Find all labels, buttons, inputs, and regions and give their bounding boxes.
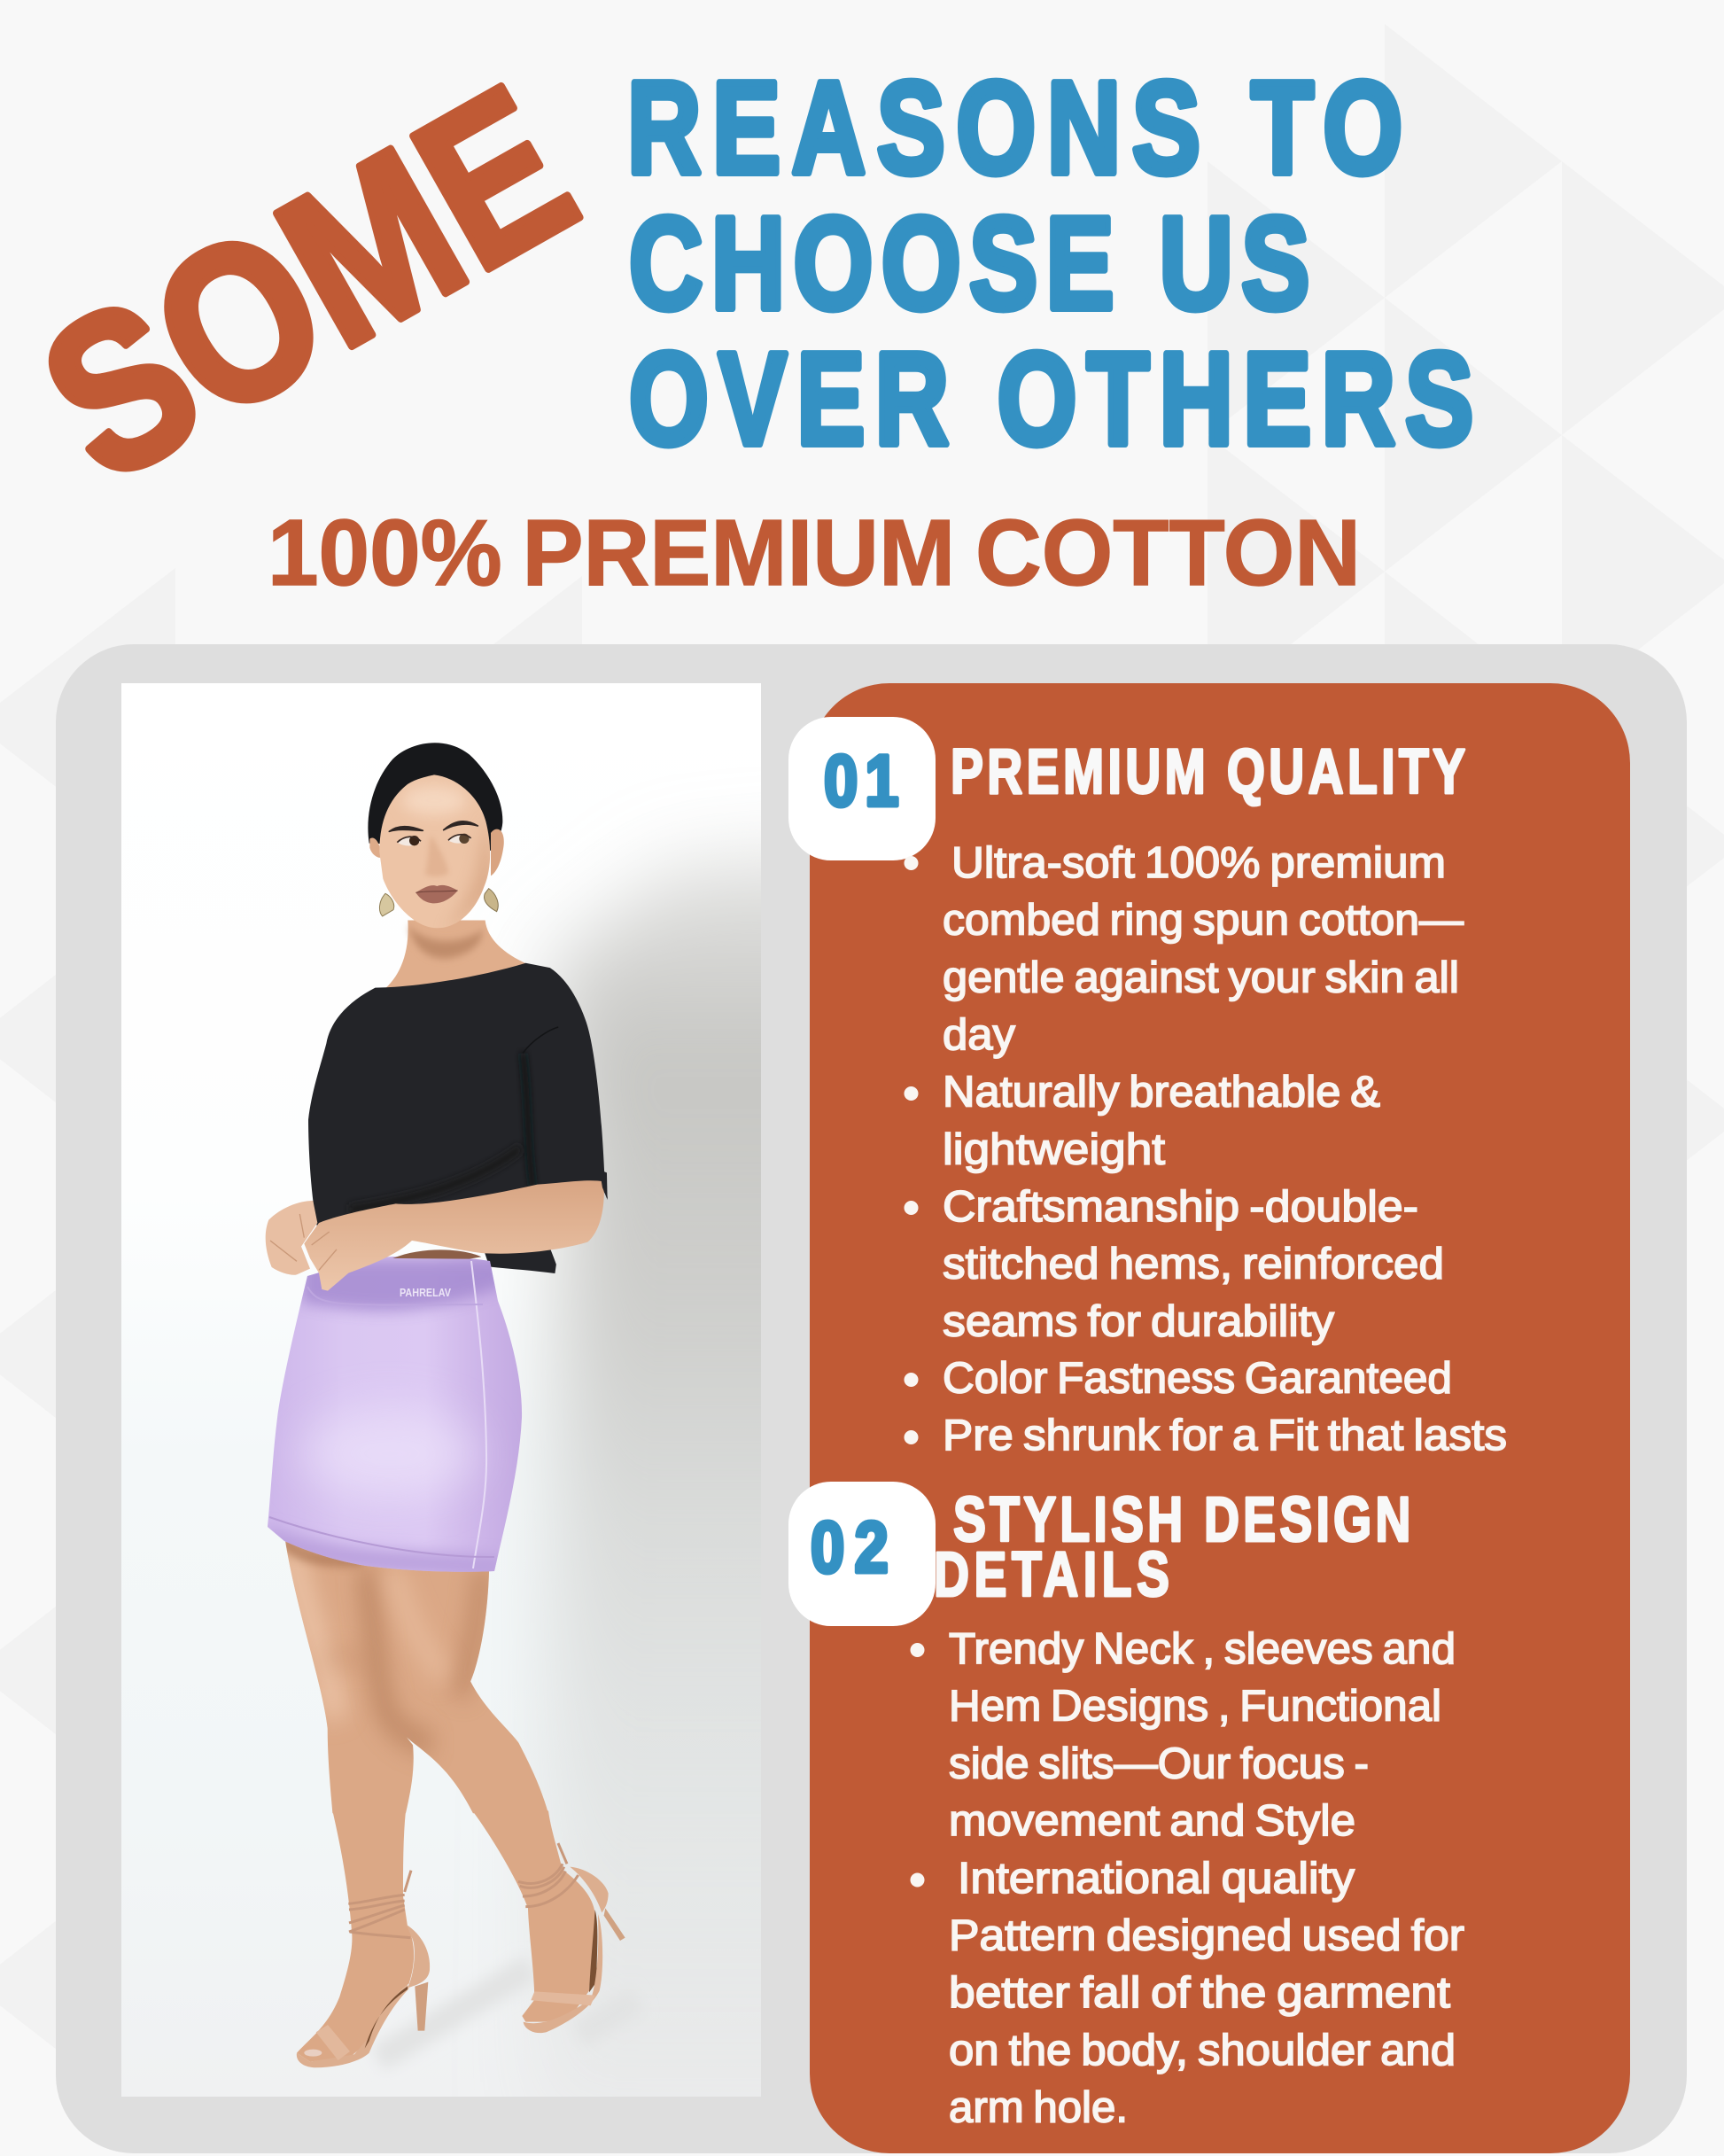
face <box>379 774 490 928</box>
product photo: woman in black crop top and lilac skirt <box>121 683 761 2097</box>
heading: stylish design details: STYLISH DESIGN <box>953 1484 1410 1555</box>
badge: 02: 02 <box>811 1506 889 1588</box>
neck and chest <box>386 920 525 987</box>
title: reasons to choose us over others: CHOOSE US <box>629 191 1309 337</box>
bullet list: premium quality: Pre shrunk for a Fit that lasts <box>943 1412 1507 1459</box>
bullet list: stylish design details: Hem Designs , Functional <box>949 1683 1441 1731</box>
black crop top <box>308 963 608 1273</box>
earrings <box>379 893 394 916</box>
floor shadows <box>377 1963 531 2065</box>
heading: stylish design details <box>934 1484 1410 1610</box>
bullet list: premium quality: gentle against your skin all <box>943 953 1459 1001</box>
front sole <box>524 1914 602 2033</box>
bullet list: premium quality: seams for durability <box>943 1297 1335 1345</box>
bullet list: stylish design details: arm hole. <box>949 2084 1128 2132</box>
left hand <box>266 1201 317 1275</box>
bullet list: stylish design details: better fall of the garment <box>949 1969 1450 2017</box>
badge: 02 <box>788 1482 936 1626</box>
bullet list: premium quality: Ultra-soft 100% premium <box>951 839 1446 887</box>
front stiletto <box>604 1908 625 1941</box>
lips <box>415 885 458 903</box>
grey content panel <box>56 644 1687 2153</box>
hair <box>368 743 502 851</box>
badge: 01: 01 <box>824 740 899 821</box>
figure: upper body <box>308 921 608 1273</box>
bullet list: stylish design details: Pattern designed used for <box>949 1912 1464 1960</box>
rear heel cup <box>406 1925 430 1988</box>
heading: premium quality: PREMIUM QUALITY <box>951 736 1465 807</box>
leg shading <box>284 1540 483 1743</box>
bullet list: premium quality: Naturally breathable & <box>943 1069 1380 1117</box>
bullet list: premium quality: Craftsmanship -double- <box>943 1183 1418 1231</box>
photo backdrop <box>121 683 761 2097</box>
front heel cup <box>570 1867 609 1912</box>
midriff <box>392 1249 481 1259</box>
word: SOME (rotated): SOME <box>5 39 610 527</box>
front toe strap <box>531 1991 595 2005</box>
panel: reasons list (orange) <box>788 683 1630 2153</box>
bullet list: stylish design details: International quality <box>958 1855 1355 1903</box>
title: reasons to choose us over others <box>627 55 1473 472</box>
figure: head <box>368 743 504 933</box>
rear ankle ties <box>348 1871 411 1938</box>
bullet list: premium quality: combed ring spun cotton— <box>943 897 1464 945</box>
front ankle ties <box>518 1843 579 1907</box>
heading: stylish design details: DETAILS <box>934 1539 1169 1610</box>
front foot <box>472 1810 595 2022</box>
rear toe strap <box>316 2025 350 2060</box>
bullet list: premium quality <box>904 839 1507 1459</box>
bullet list: stylish design details: movement and Style <box>949 1797 1355 1845</box>
rear foot <box>297 1810 414 2062</box>
figure: lilac skirt <box>266 1257 522 1572</box>
figure: legs <box>284 1536 548 1813</box>
bullet list: premium quality: Color Fastness Garanteed <box>943 1354 1452 1402</box>
waistband logo: PAHRELAV <box>400 1286 451 1299</box>
front thigh and calf <box>366 1554 548 1813</box>
sleeve cuff <box>600 1170 608 1200</box>
ears <box>369 837 382 858</box>
badge: 01 <box>788 717 936 860</box>
bullet list: stylish design details <box>911 1625 1464 2132</box>
title: reasons to choose us over others: REASONS TO <box>627 55 1402 201</box>
figure: midriff, arm and hands <box>266 1170 608 1291</box>
rear stiletto <box>415 1982 428 2031</box>
eyebrows <box>389 821 478 831</box>
bullet list: stylish design details: on the body, shoulder and <box>949 2027 1456 2074</box>
bullet list: premium quality: lightweight <box>943 1125 1165 1173</box>
rear sole <box>297 1985 409 2067</box>
title: reasons to choose us over others: OVER OTHERS <box>629 326 1473 472</box>
forearm and right hand <box>304 1180 604 1291</box>
bullet list: stylish design details: Trendy Neck , sleeves and <box>949 1625 1456 1673</box>
subtitle: 100% premium cotton: 100% PREMIUM COTTON <box>268 501 1361 605</box>
bullet list: stylish design details: side slits—Our focus - <box>949 1740 1369 1787</box>
rear thigh and calf <box>284 1536 414 1813</box>
bullet list: premium quality: stitched hems, reinforced <box>943 1241 1444 1288</box>
figure: sandals and feet <box>297 1810 638 2067</box>
eyes <box>397 837 421 846</box>
bullet list: premium quality: day <box>943 1011 1016 1059</box>
